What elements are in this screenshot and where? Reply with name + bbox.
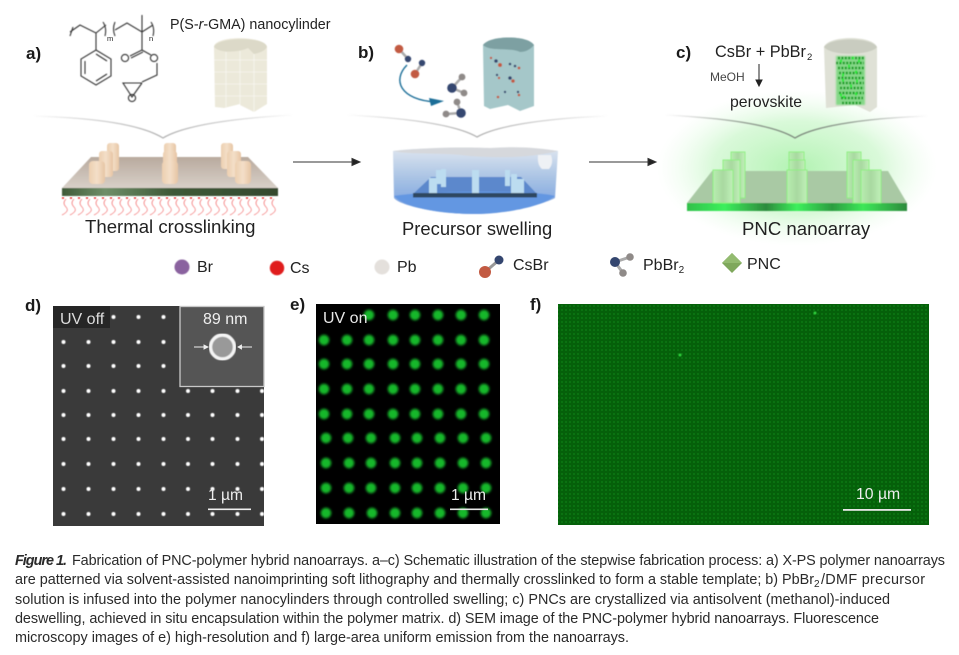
legend: Pb: [374, 259, 417, 276]
caption: precursor swelling: Precursor swelling: [402, 218, 552, 239]
scale bar 1 um: 1 µm: [208, 487, 243, 504]
legend: PNC: PNC: [747, 256, 781, 273]
caption line 2 subscript: 2: [814, 579, 820, 590]
caption line 3: solution is infused into the polymer nanocylinders through controlled swelling; c) PNCs are crystallized via antisolvent (methanol)-induced: [15, 592, 890, 608]
scale bar 10 um: 10 µm: [856, 486, 900, 503]
green array texture: [558, 304, 929, 525]
inset: 89 nm particle: 89 nm: [203, 311, 247, 328]
caption line 4: deswelling, achieved in situ encapsulation within the polymer matrix. d) SEM image of the PNC-polymer hybrid nanoarrays. Fluorescence: [15, 611, 879, 627]
caption: thermal crosslinking: Thermal crosslinking: [85, 216, 256, 237]
SEM background: [53, 306, 264, 526]
arrow a to b: [293, 158, 360, 166]
bright specks: [680, 313, 815, 355]
legend: PNC: [722, 253, 781, 273]
legend: Br: Br: [197, 259, 214, 276]
precursor dish with submerged array: [393, 147, 558, 214]
reaction equation: CsBr + PbBr: [715, 43, 807, 61]
legend: Cs: [270, 260, 310, 277]
swoosh connector: [347, 115, 608, 137]
precursor molecules: [395, 45, 467, 118]
panel label e: e): [290, 295, 305, 314]
polymer name label: P(S-r-GMA) nanocylinder: [170, 17, 331, 33]
figure caption: [15, 553, 945, 646]
panel d: SEM image: [53, 306, 264, 526]
caption line 2 end: /DMF precursor: [821, 572, 925, 588]
panel label d: d): [25, 296, 41, 315]
SEM dots: [64, 317, 262, 514]
panel label b: b): [358, 43, 374, 62]
legend: Cs: Cs: [290, 260, 310, 277]
legend: Pb: Pb: [397, 259, 417, 276]
icon: swollen nanocylinder: [483, 38, 534, 111]
caption heading: Figure 1.: [15, 553, 67, 569]
panel e: fluorescence high resolution: [316, 304, 500, 524]
caption line 5: microscopy images of e) high-resolution and f) large-area uniform emission from the nanoarrays.: [15, 630, 629, 646]
icon: nanocylinder with PNC particles: [824, 38, 877, 112]
scale bar 1 um: [450, 487, 488, 510]
UV off label: UV off: [60, 311, 105, 328]
swoosh connector: [33, 115, 293, 138]
legend: PbBr2: PbBr: [643, 257, 679, 274]
swoosh connector: [665, 115, 928, 138]
legend: [174, 253, 781, 278]
UV off label: [53, 306, 110, 328]
black background: [316, 304, 500, 524]
inset: 89 nm particle: [180, 306, 264, 386]
polymer chemical structure: [70, 15, 158, 102]
panel label f: f): [530, 295, 541, 314]
legend: PbBr2: 2: [679, 265, 685, 276]
scale bar 10 um: [843, 486, 911, 511]
panel a: thermal crosslinking schematic: [26, 15, 331, 237]
icon: polymer nanocylinder cutaway: [214, 38, 267, 112]
UV on label: UV on: [323, 310, 367, 327]
legend: Br: [174, 259, 214, 276]
legend: CsBr: [479, 256, 549, 278]
substrate with nanocylinders: [62, 143, 278, 196]
arrow b to c: [589, 158, 656, 166]
caption line 2: are patterned via solvent-assisted nanoimprinting soft lithography and thermally crosslinked to form a stable template; b) PbBr: [15, 572, 814, 588]
caption: PNC nanoarray: PNC nanoarray: [742, 218, 871, 239]
panel f: fluorescence large area: [558, 304, 929, 525]
green emission dots: [324, 315, 486, 513]
perovskite label: perovskite: [730, 94, 802, 111]
panel b: precursor swelling schematic: [347, 38, 608, 239]
MeOH label: MeOH: [710, 70, 745, 84]
reaction arrow: [756, 64, 762, 86]
scale bar 1 um: [208, 487, 251, 510]
heat waves: [62, 198, 278, 215]
legend: CsBr: CsBr: [513, 257, 549, 274]
polymer subscripts: [107, 34, 153, 43]
equation subscript: 2: [807, 52, 812, 63]
curved blue arrow: [400, 65, 444, 106]
scale bar 1 um: 1 µm: [451, 487, 486, 504]
polymer subscripts: m: [107, 34, 113, 43]
glowing substrate with pillars: [687, 152, 907, 211]
panel label a: a): [26, 44, 41, 63]
panel label c: c): [676, 43, 691, 62]
polymer subscripts: n: [149, 34, 153, 43]
green glow: [657, 90, 937, 246]
panel c: PNC nanoarray schematic: [657, 38, 937, 246]
legend: PbBr2: [610, 253, 685, 277]
caption line 1: Fabrication of PNC-polymer hybrid nanoarrays. a–c) Schematic illustration of the stepwise fabrication process: a) X-PS polymer nanoarrays: [72, 553, 945, 569]
